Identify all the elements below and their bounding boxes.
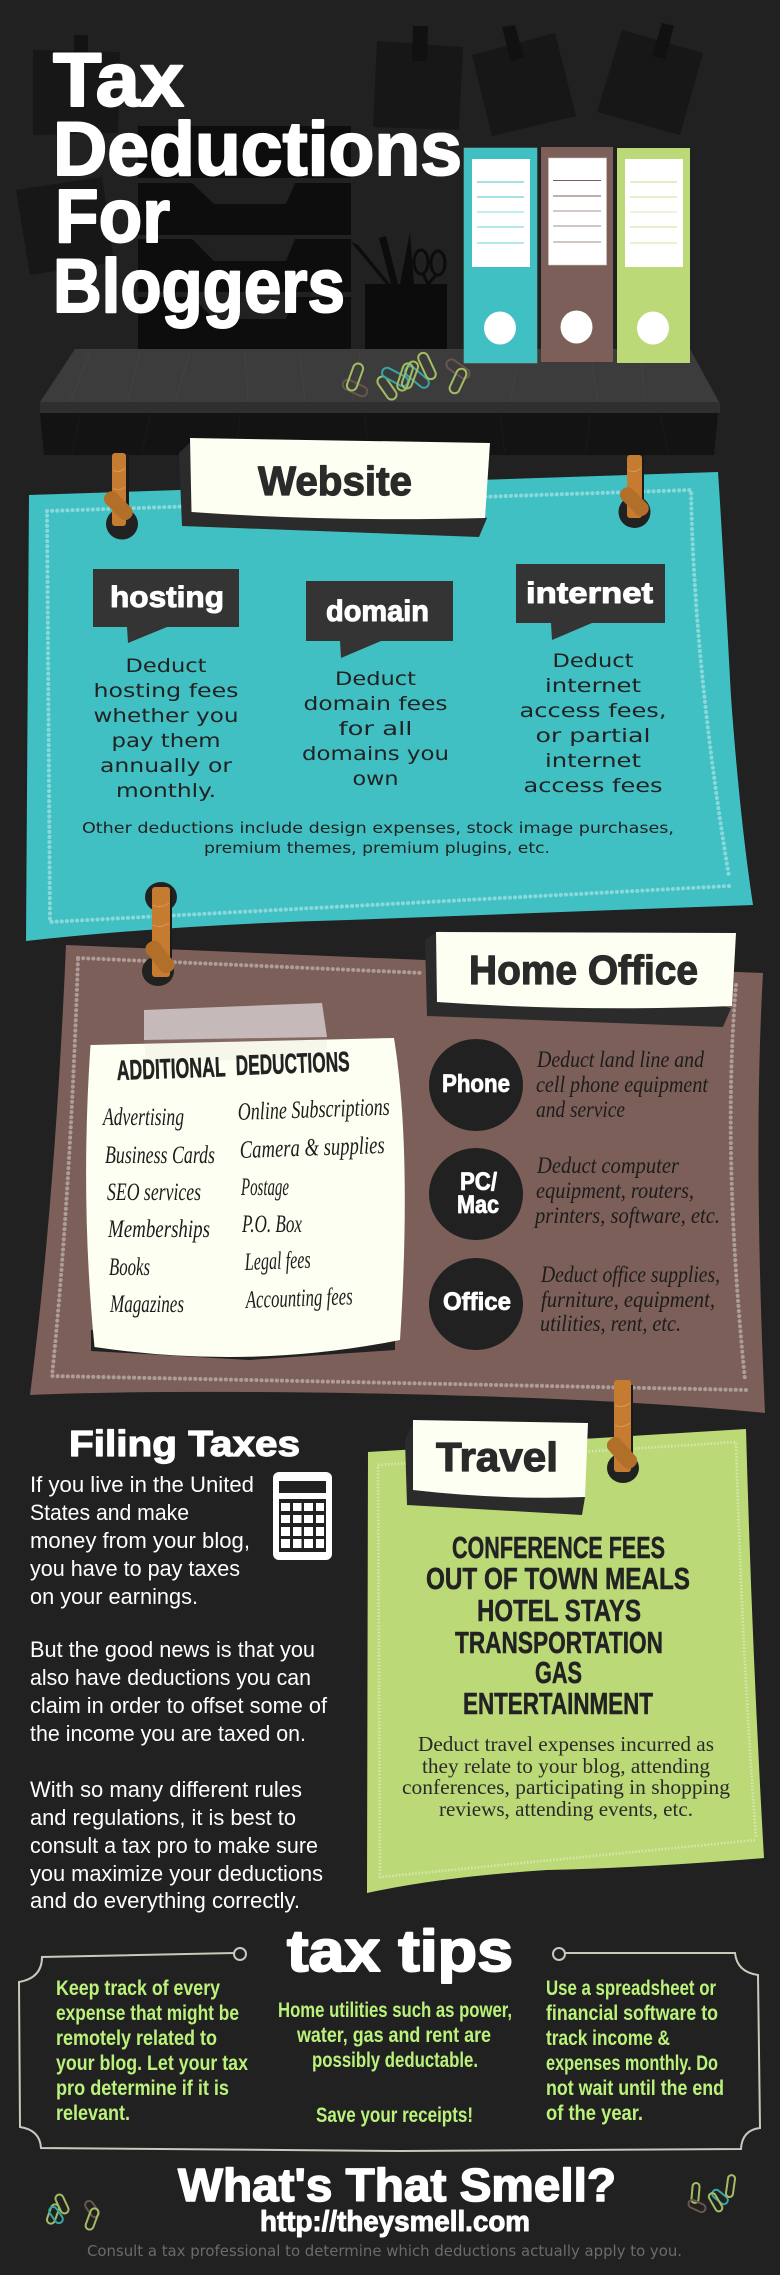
note: additional deductions: Advertising bbox=[102, 1104, 184, 1131]
rope: website panel to home office panel bbox=[143, 887, 177, 977]
card: domain: for all bbox=[338, 718, 412, 740]
binder: brown bbox=[541, 147, 613, 362]
note: additional deductions: Camera & supplies bbox=[239, 1132, 385, 1164]
binder: green bbox=[617, 148, 690, 363]
item: PC / Mac bbox=[429, 1148, 720, 1240]
card: domain: domain fees bbox=[304, 693, 448, 715]
note: additional deductions: Online Subscriptions bbox=[237, 1094, 390, 1126]
panel: brown home office bbox=[30, 930, 765, 1413]
heading label: Website bbox=[179, 438, 490, 537]
note: additional deductions: Books bbox=[109, 1254, 150, 1281]
heading label: Travel bbox=[405, 1420, 588, 1515]
tip: keep track: expense that might be bbox=[56, 2002, 239, 2025]
tip: keep track: your blog. Let your tax bbox=[56, 2052, 248, 2075]
card: hosting: monthly. bbox=[116, 780, 216, 802]
tip: keep track: remotely related to bbox=[56, 2027, 217, 2050]
section: tax tips bbox=[19, 1919, 760, 2151]
card: internet: internet bbox=[526, 577, 653, 610]
footer: brand: http://theysmell.com bbox=[260, 2206, 530, 2238]
disclaimer: Consult a tax professional to determine which deductions actually apply to you. bbox=[87, 2242, 682, 2260]
binders bbox=[464, 147, 690, 363]
item: PC / Mac: PC/ bbox=[460, 1168, 497, 1196]
card: hosting: whether you bbox=[94, 705, 238, 727]
title: Deductions bbox=[53, 107, 462, 192]
text: other deductions: premium themes, premium plugins, etc. bbox=[204, 839, 550, 857]
icon: paperclips on desk bbox=[341, 351, 472, 402]
item: PC / Mac: Deduct computer bbox=[536, 1153, 680, 1178]
footer: brand: What's That Smell? bbox=[178, 2159, 616, 2211]
heading label: Travel: Travel bbox=[436, 1434, 558, 1480]
rope: right desk to website panel bbox=[617, 455, 652, 519]
icon: paperclips bottom right bbox=[687, 2175, 735, 2213]
text: travel description: conferences, participating in shopping bbox=[402, 1775, 731, 1799]
text block: paragraph 1: you have to pay taxes bbox=[30, 1556, 240, 1581]
text block: paragraph 3: you maximize your deductions bbox=[30, 1861, 323, 1886]
heading: tax tips bbox=[287, 1919, 513, 1984]
item: office: Office bbox=[443, 1288, 511, 1316]
item: phone: cell phone equipment bbox=[536, 1072, 709, 1097]
note: additional deductions: Magazines bbox=[109, 1291, 184, 1318]
card: internet: access fees bbox=[524, 775, 662, 797]
heading label: Home Office: Home Office bbox=[469, 947, 698, 993]
list: travel deductions: GAS bbox=[535, 1655, 582, 1690]
footer: brand bbox=[178, 2159, 616, 2238]
text block: paragraph 2: also have deductions you can bbox=[30, 1665, 311, 1690]
panel: teal website bbox=[26, 438, 753, 941]
card: hosting: Deduct bbox=[126, 655, 206, 677]
item: phone: and service bbox=[536, 1097, 625, 1122]
item: office bbox=[429, 1258, 720, 1350]
text: other deductions: Other deductions include design expenses, stock image purchases, bbox=[82, 819, 674, 837]
card: domain: domain bbox=[326, 595, 429, 628]
title bbox=[53, 38, 462, 329]
text block: paragraph 1: money from your blog, bbox=[30, 1528, 250, 1553]
note: additional deductions: Postage bbox=[240, 1174, 289, 1201]
text block: paragraph 1: If you live in the United bbox=[30, 1472, 254, 1497]
heading label: Website: Website bbox=[258, 458, 412, 504]
card: domain bbox=[302, 581, 453, 790]
tip: spreadsheet: expenses monthly. Do bbox=[546, 2052, 718, 2075]
card: domain: Deduct bbox=[335, 668, 416, 690]
note: additional deductions: Legal fees bbox=[244, 1247, 311, 1276]
note: additional deductions: P.O. Box bbox=[241, 1211, 302, 1238]
desk bbox=[40, 349, 720, 455]
note: additional deductions: ADDITIONAL bbox=[116, 1051, 226, 1086]
tip: keep track: Keep track of every bbox=[56, 1977, 220, 2000]
item: phone bbox=[429, 1039, 709, 1131]
card: internet: or partial bbox=[536, 725, 650, 747]
text block: paragraph 1: on your earnings. bbox=[30, 1584, 198, 1609]
list: travel deductions: TRANSPORTATION bbox=[455, 1625, 663, 1660]
text block: paragraph 3: and regulations, it is best to bbox=[30, 1805, 296, 1830]
text: other deductions bbox=[82, 819, 674, 857]
text block: paragraph 2: But the good news is that you bbox=[30, 1637, 315, 1662]
tip: keep track: relevant. bbox=[56, 2102, 130, 2125]
panel: green travel bbox=[367, 1420, 764, 1893]
card: hosting: annually or bbox=[100, 755, 232, 777]
text block: paragraph 2: the income you are taxed on. bbox=[30, 1721, 306, 1746]
tip: home utilities: possibly deductable. bbox=[312, 2049, 478, 2072]
card: domain: domains you bbox=[302, 743, 449, 765]
title: For bbox=[55, 174, 170, 259]
text: travel description: Deduct travel expenses incurred as bbox=[418, 1732, 714, 1756]
text block: paragraph 2 bbox=[30, 1637, 328, 1746]
background silhouettes: pinned papers, trays, pen cup bbox=[16, 23, 703, 349]
tip: home utilities: water, gas and rent are bbox=[296, 2024, 491, 2047]
tip: home utilities bbox=[278, 1999, 512, 2127]
icon: paperclips bottom left bbox=[46, 2193, 100, 2231]
list: travel deductions bbox=[426, 1530, 690, 1721]
note: additional deductions: DEDUCTIONS bbox=[235, 1046, 350, 1081]
card: hosting bbox=[93, 569, 239, 802]
card: internet: internet bbox=[545, 675, 641, 697]
item: office: furniture, equipment, bbox=[541, 1287, 715, 1312]
item: PC / Mac: Mac bbox=[457, 1191, 499, 1219]
text block: paragraph 1: States and make bbox=[30, 1500, 189, 1525]
note: additional deductions: Memberships bbox=[107, 1216, 210, 1243]
title: Bloggers bbox=[53, 244, 345, 329]
rope: home office panel to travel panel bbox=[604, 1380, 640, 1472]
note: additional deductions: SEO services bbox=[107, 1179, 201, 1206]
item: PC / Mac: printers, software, etc. bbox=[533, 1203, 720, 1228]
text block: paragraph 3: and do everything correctly. bbox=[30, 1888, 300, 1913]
tip: spreadsheet: of the year. bbox=[546, 2102, 643, 2125]
section: filing taxes bbox=[30, 1423, 332, 1913]
text block: paragraph 3: With so many different rules bbox=[30, 1777, 302, 1802]
list: travel deductions: ENTERTAINMENT bbox=[463, 1686, 653, 1721]
heading label: Home Office bbox=[425, 930, 736, 1027]
item: office: utilities, rent, etc. bbox=[540, 1311, 681, 1336]
tip: spreadsheet: Use a spreadsheet or bbox=[546, 1977, 716, 2000]
item: phone: Deduct land line and bbox=[536, 1047, 704, 1072]
heading: Filing Taxes bbox=[69, 1423, 300, 1464]
title: Tax bbox=[53, 38, 184, 123]
note: additional deductions: Business Cards bbox=[105, 1142, 215, 1169]
rope: left desk to website panel bbox=[101, 453, 136, 526]
text: travel description: they relate to your blog, attending bbox=[422, 1754, 710, 1778]
card: internet bbox=[516, 564, 666, 797]
tip: keep track bbox=[56, 1977, 248, 2125]
card: internet: Deduct bbox=[552, 650, 634, 672]
frame bbox=[19, 1948, 760, 2151]
item: office: Deduct office supplies, bbox=[540, 1262, 720, 1287]
list: travel deductions: OUT OF TOWN MEALS bbox=[426, 1561, 690, 1596]
tip: spreadsheet: track income & bbox=[546, 2027, 670, 2050]
tip: spreadsheet: financial software to bbox=[546, 2002, 718, 2025]
text block: paragraph 3: consult a tax pro to make sure bbox=[30, 1833, 318, 1858]
text: travel description: reviews, attending events, etc. bbox=[439, 1797, 693, 1821]
text block: paragraph 2: claim in order to offset some of bbox=[30, 1693, 328, 1718]
text block: paragraph 1 bbox=[30, 1472, 254, 1609]
tip: home utilities: Save your receipts! bbox=[316, 2104, 473, 2127]
tip: spreadsheet: not wait until the end bbox=[546, 2077, 724, 2100]
tip: spreadsheet bbox=[546, 1977, 724, 2125]
text: travel description bbox=[402, 1732, 731, 1821]
text block: paragraph 3 bbox=[30, 1777, 323, 1913]
list: travel deductions: HOTEL STAYS bbox=[477, 1593, 641, 1628]
icon: calculator bbox=[273, 1472, 332, 1560]
note: additional deductions: Accounting fees bbox=[244, 1283, 353, 1314]
card: hosting: pay them bbox=[112, 730, 220, 752]
card: hosting: hosting bbox=[110, 581, 224, 614]
card: internet: access fees, bbox=[520, 700, 666, 722]
card: internet: internet bbox=[545, 750, 641, 772]
list: travel deductions: CONFERENCE FEES bbox=[452, 1530, 665, 1565]
card: domain: own bbox=[352, 768, 398, 790]
item: phone: Phone bbox=[442, 1070, 510, 1098]
item: PC / Mac: equipment, routers, bbox=[536, 1178, 694, 1203]
note: additional deductions bbox=[86, 1003, 405, 1360]
tip: home utilities: Home utilities such as power, bbox=[278, 1999, 512, 2022]
card: hosting: hosting fees bbox=[94, 680, 238, 702]
binder: teal bbox=[464, 148, 537, 363]
tip: keep track: pro determine if it is bbox=[56, 2077, 229, 2100]
